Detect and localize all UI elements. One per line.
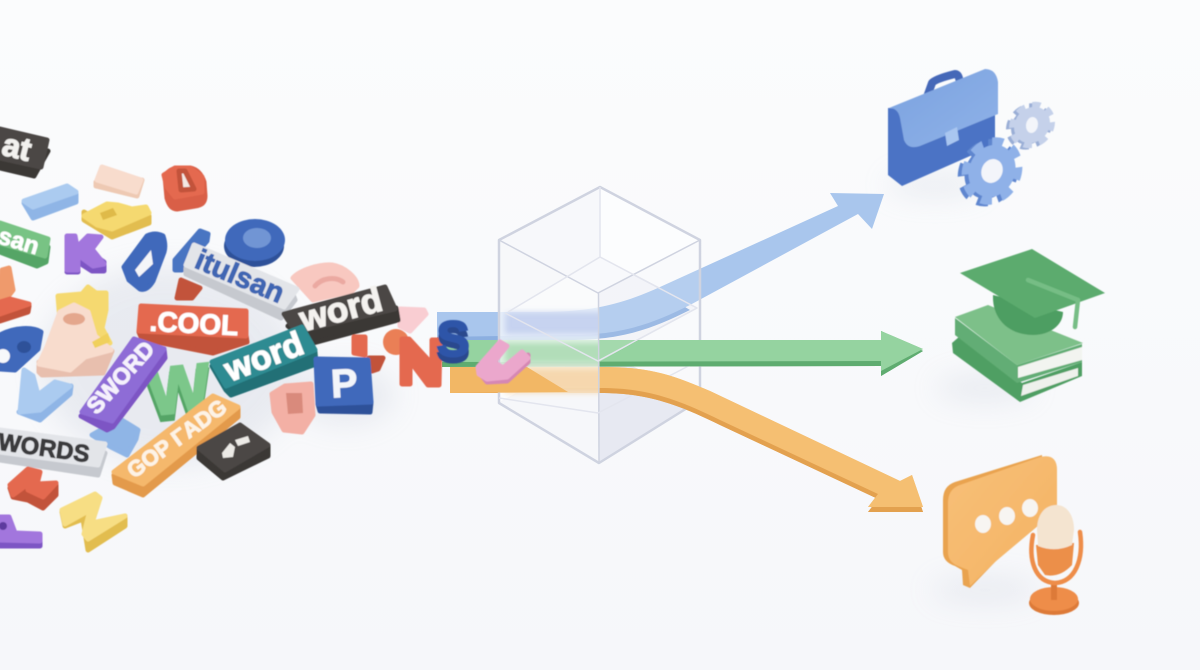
letter: big peach A	[39, 305, 112, 375]
glass cube front	[499, 187, 700, 463]
letter bar: blue	[175, 231, 208, 270]
letter: yellow Z	[62, 494, 125, 550]
lower book	[952, 336, 1082, 402]
glass cube back	[499, 257, 700, 463]
arrow: orange to speech	[450, 367, 923, 512]
letter: yellow P	[84, 204, 149, 237]
blob: red-orange	[177, 280, 200, 298]
bubble dots	[975, 499, 1038, 533]
icon: briefcase and gears	[888, 69, 1051, 204]
letter: pink U	[478, 342, 528, 382]
letter: navy outline shape	[124, 234, 165, 289]
letter: red N	[402, 339, 440, 385]
letter: red I	[354, 337, 383, 371]
letter: red D	[164, 168, 205, 209]
tile: SWORD: SWORD	[81, 336, 159, 419]
microphone stand and base	[1029, 582, 1079, 615]
letter: orange C	[383, 329, 409, 355]
briefcase handle	[927, 74, 960, 97]
scattered word tiles and letters	[0, 126, 528, 550]
bubble face	[948, 456, 1057, 586]
letter: navy fragment	[0, 329, 41, 370]
letter: purple P	[0, 517, 40, 546]
letter bar: light blue	[24, 186, 76, 218]
microphone head	[1037, 505, 1074, 549]
letter: navy S: S	[436, 317, 470, 373]
letter: light blue V	[19, 370, 71, 420]
tile: .COOL	[139, 306, 247, 353]
letter: small blue Z	[92, 419, 138, 455]
letter: orange shard	[0, 268, 13, 298]
letter: pale pink wedge	[400, 309, 426, 331]
tile: P blue	[316, 359, 371, 412]
tile: .COOL: .COOL	[149, 306, 239, 341]
tile: itulsan: itulsan	[190, 244, 289, 310]
letter: navy S: S	[436, 311, 470, 367]
briefcase body	[888, 108, 995, 186]
letter: green W: W	[144, 349, 214, 429]
bubble edge	[943, 455, 1042, 588]
tile: word teal: word	[218, 325, 309, 390]
arrow: green to study	[442, 331, 923, 376]
tile: dark small	[199, 425, 268, 478]
tile: P blue: P	[330, 361, 359, 407]
tile: word dark: word	[294, 280, 386, 339]
letter: red wedge	[0, 299, 29, 321]
letter bar: peach	[96, 167, 142, 196]
arrow: blue to work	[437, 193, 884, 342]
cap base	[993, 295, 1063, 335]
letter: yellow star behind	[58, 287, 110, 345]
cap tassel	[1028, 280, 1078, 327]
tile: at	[0, 126, 48, 176]
briefcase flap	[889, 69, 998, 147]
microphone cup	[1036, 543, 1074, 576]
letter: blue O	[224, 219, 285, 267]
cap board	[960, 249, 1105, 318]
icon: speech bubble and microphone	[943, 455, 1081, 615]
arrow sections in front of cube	[442, 331, 923, 512]
briefcase clasp	[945, 127, 959, 146]
microphone cradle	[1031, 532, 1081, 583]
soft ground shadows	[40, 173, 1040, 602]
large gear	[963, 139, 1017, 204]
tile: GOP ADG: GOP ΓADG	[122, 394, 231, 483]
icon: graduation cap and books	[952, 249, 1105, 402]
small gear	[1010, 103, 1051, 148]
upper book	[955, 305, 1083, 383]
letter: green W: W	[144, 355, 214, 435]
letter: purple K	[67, 236, 104, 272]
letter: pale pink C	[293, 265, 357, 300]
letter: pink e	[272, 384, 313, 432]
letter: red small N	[10, 469, 56, 508]
